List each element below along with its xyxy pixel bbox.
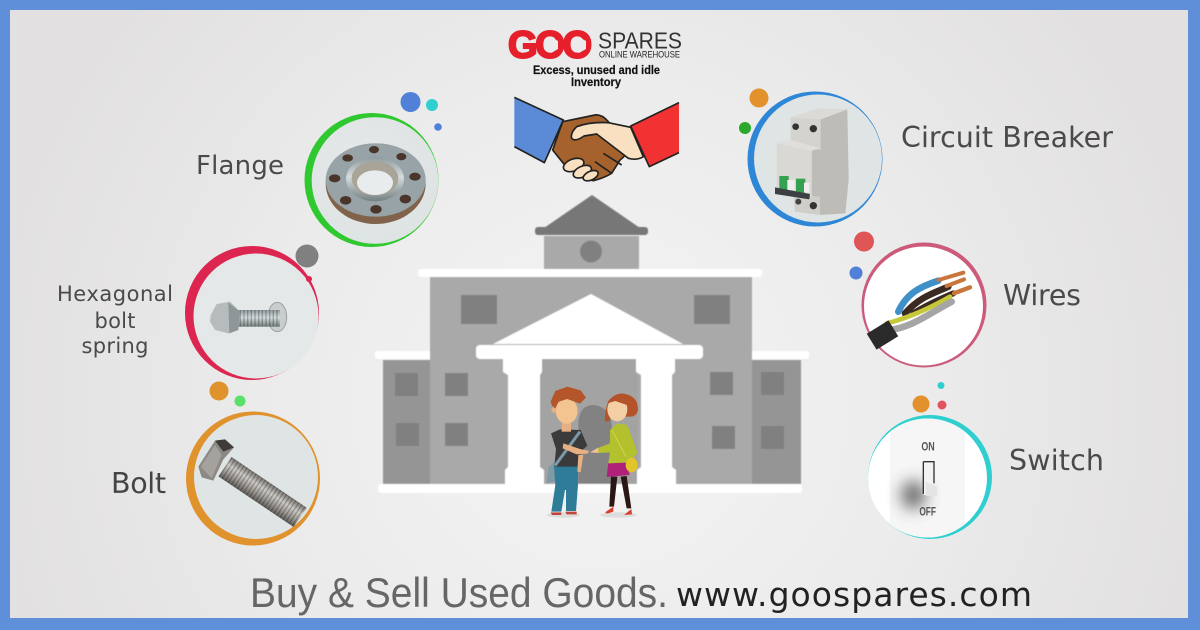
- label: hexagonal bolt spring: spring: [82, 334, 148, 358]
- panel: bolt: [186, 412, 320, 546]
- icon: toggle switch: [890, 418, 965, 538]
- icon: toggle switch: ON: [921, 440, 935, 454]
- icon: circuit breaker: [775, 108, 849, 215]
- decorative dots: switch: [912, 382, 946, 412]
- footer website: www.goospares.com: [676, 575, 1032, 614]
- decorative dots: bolt: [210, 382, 246, 406]
- label: switch: Switch: [1009, 444, 1104, 477]
- tagline: Inventory: [571, 77, 622, 89]
- label: flange: Flange: [196, 151, 284, 181]
- decorative dots: wires: [850, 232, 874, 280]
- decorative dots: flange: [400, 92, 442, 131]
- tagline: [533, 65, 660, 89]
- building illustration: [375, 195, 809, 493]
- panel: switch: [868, 415, 992, 539]
- logo: Goo Spares: [508, 24, 682, 66]
- icon: flange part: [326, 143, 426, 224]
- label: bolt: Bolt: [111, 467, 166, 500]
- decorative dots: circuit breaker: [739, 88, 768, 134]
- logo: Goo Spares: GOO: [508, 24, 592, 66]
- panel: circuit breaker: [748, 92, 882, 226]
- label: hexagonal bolt spring: [57, 282, 173, 358]
- icon: toggle switch: OFF: [919, 505, 936, 519]
- panel: wires: [862, 242, 986, 368]
- label: circuit breaker: Circuit Breaker: [901, 121, 1113, 154]
- footer slogan: Buy & Sell Used Goods.: [250, 569, 668, 616]
- icon: hex bolt with washer: [210, 302, 287, 333]
- label: hexagonal bolt spring: Hexagonal: [57, 282, 173, 306]
- tagline: Excess, unused and idle: [533, 65, 660, 77]
- icon: bolt: [198, 439, 307, 527]
- panel: hexagonal bolt spring: [185, 246, 319, 380]
- logo: Goo Spares: ONLINE WAREHOUSE: [599, 50, 680, 60]
- panel: flange: [304, 113, 438, 247]
- icon: handshake: [514, 97, 679, 183]
- icon: cable wires: [872, 273, 970, 342]
- people shaking hands: [547, 387, 638, 518]
- decorative dots: hex bolt: [296, 244, 318, 282]
- logo: Goo Spares: SPARES: [598, 28, 682, 54]
- label: hexagonal bolt spring: bolt: [94, 309, 136, 333]
- label: wires: Wires: [1003, 279, 1081, 312]
